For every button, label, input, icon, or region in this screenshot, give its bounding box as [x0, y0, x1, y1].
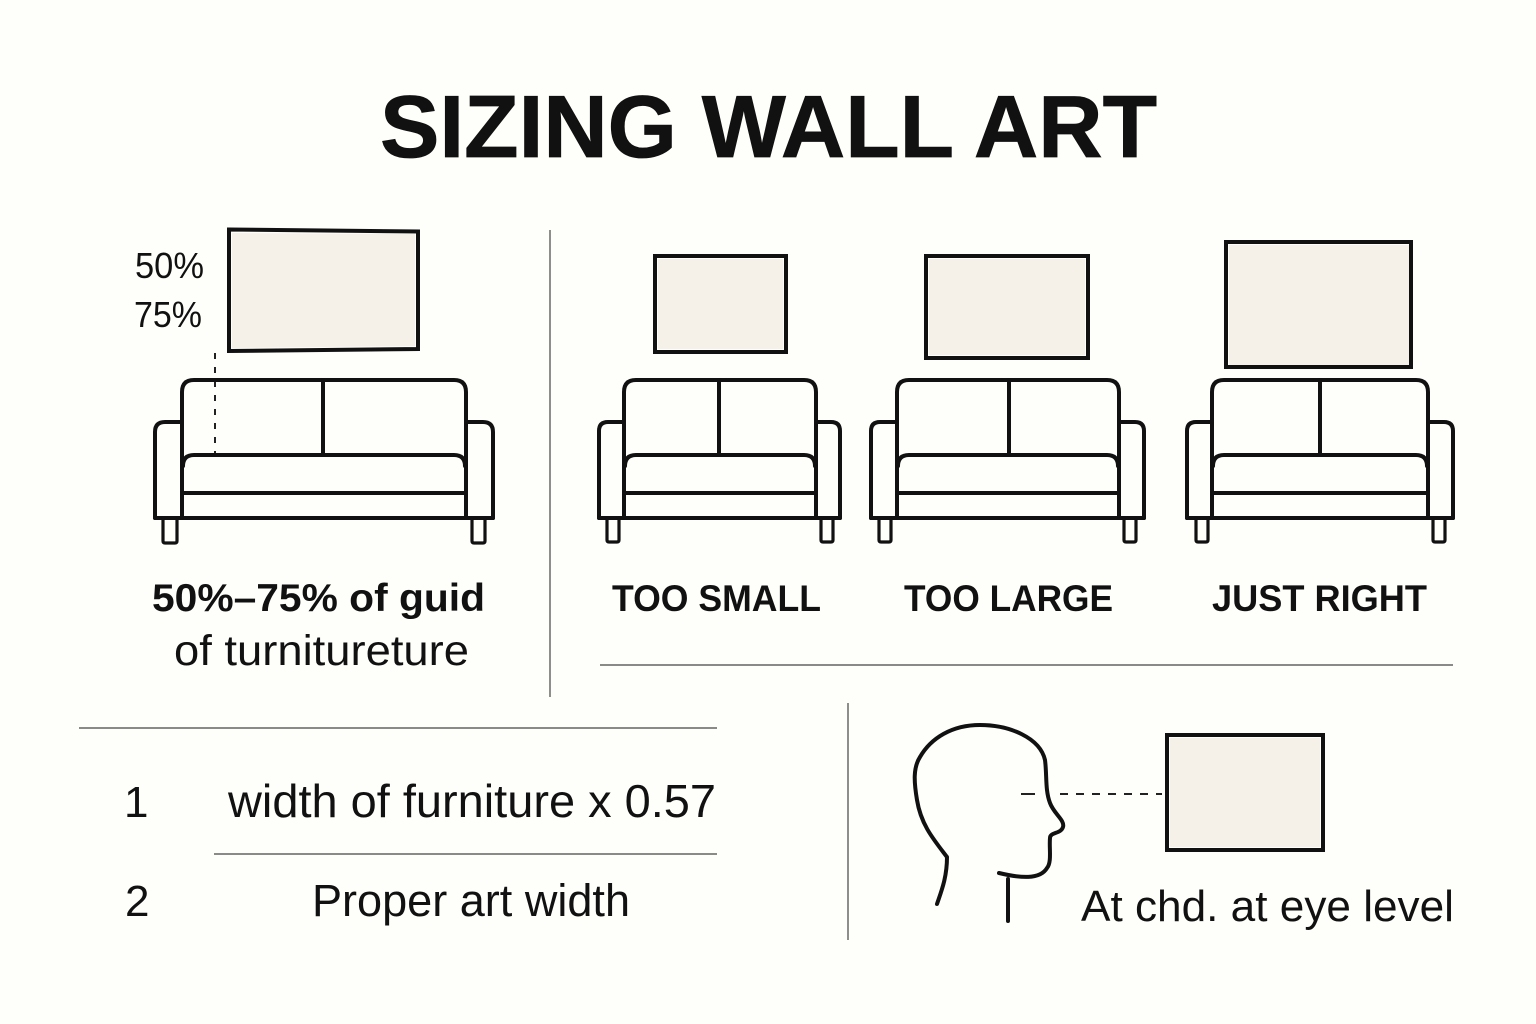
guideline caption — [152, 577, 485, 675]
divider: vertical upper — [549, 230, 551, 697]
art frame — [1167, 735, 1323, 850]
icon: head profile — [915, 725, 1063, 921]
label: JUST RIGHT — [1212, 578, 1427, 619]
dashed width guide — [214, 353, 216, 455]
row rule — [214, 853, 717, 855]
step 2 number: 2 — [125, 877, 149, 926]
sofa — [155, 380, 493, 543]
art frame — [655, 256, 786, 352]
percentage labels: 75% — [134, 294, 202, 335]
guideline caption: 50%–75% of guid — [152, 577, 485, 620]
panel: eye level — [915, 725, 1454, 931]
title: SIZING WALL ART — [380, 77, 1157, 176]
divider: horizontal under examples — [600, 664, 1453, 666]
guideline caption: of turnitureture — [174, 627, 469, 675]
sofa — [599, 380, 840, 542]
eye line — [1021, 793, 1162, 795]
top rule — [79, 727, 717, 729]
percentage labels: 50% — [135, 245, 204, 286]
step 2 result: Proper art width — [312, 875, 630, 926]
divider: vertical lower — [847, 703, 849, 940]
panel: formula — [79, 728, 717, 926]
label: TOO SMALL — [612, 578, 821, 619]
percentage labels — [134, 245, 204, 335]
panel: just right — [1187, 242, 1453, 619]
art frame — [926, 256, 1088, 358]
sofa — [871, 380, 1144, 542]
panel: too small — [599, 256, 840, 619]
panel: too large — [871, 256, 1144, 619]
art frame — [229, 230, 418, 351]
art frame — [1226, 242, 1411, 367]
label: TOO LARGE — [904, 578, 1113, 619]
caption: At chd. at eye level — [1081, 883, 1454, 931]
step 1 number: 1 — [124, 778, 148, 827]
sofa — [1187, 380, 1453, 542]
step 1 formula: width of furniture x 0.57 — [227, 775, 716, 827]
panel: 50–75% guideline — [134, 230, 493, 675]
